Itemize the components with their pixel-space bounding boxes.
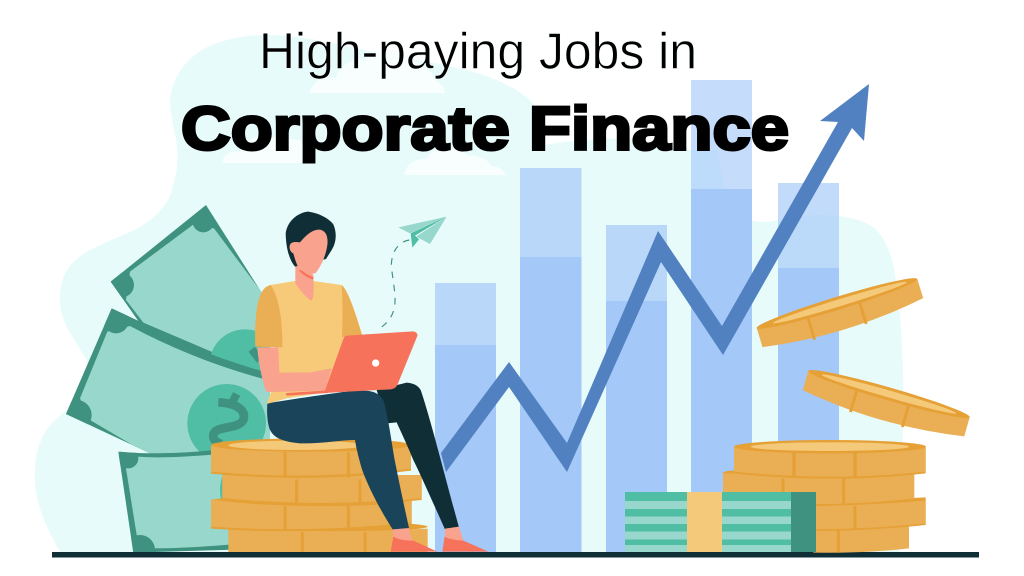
shirt [267, 281, 350, 404]
hair [286, 212, 336, 267]
coin 3 [211, 495, 412, 531]
paper plane with dashed trail [381, 217, 447, 328]
neck [295, 262, 314, 301]
plane [398, 217, 447, 248]
bar 4 [691, 80, 752, 552]
right coin stack [723, 440, 926, 553]
neck shadow [300, 270, 313, 278]
dark stripes [625, 492, 791, 545]
background blob [35, 35, 903, 552]
cloud: upper [310, 49, 445, 93]
paper band [687, 492, 722, 552]
bar 3 [606, 225, 667, 552]
laptop [324, 331, 417, 393]
coin 1 with gold top [211, 438, 411, 478]
dashed trail [381, 240, 409, 328]
man sitting with laptop [255, 212, 488, 552]
bar 2 [520, 168, 582, 552]
coin A with gold top [734, 440, 926, 479]
ground line [52, 552, 979, 558]
laptop base [287, 392, 327, 394]
banknotes [62, 200, 301, 565]
bundle side [791, 492, 816, 552]
arm [257, 347, 332, 392]
bar 5 [778, 183, 839, 552]
upper body [255, 212, 417, 404]
title [181, 22, 789, 162]
title line 1: High-paying Jobs in [259, 22, 697, 80]
left sleeve [255, 285, 282, 347]
bar 1 [435, 283, 496, 552]
far foot [445, 527, 463, 541]
rising arrow line [441, 84, 869, 472]
coin stack under the man [211, 438, 428, 552]
falling coin: upper [755, 273, 926, 355]
legs and shoes [267, 383, 488, 552]
coin D [813, 523, 909, 553]
coin 2 [222, 475, 422, 505]
cloud: right [404, 147, 506, 175]
near leg [267, 390, 409, 529]
cloud: left [222, 136, 310, 163]
coin 4 [228, 522, 428, 552]
falling coin: lower [801, 365, 972, 444]
far leg [377, 383, 459, 529]
bundle stripes [625, 492, 791, 552]
near foot [393, 528, 413, 542]
banknote: middle [66, 308, 270, 454]
right sleeve [342, 285, 362, 337]
title line 2: Corporate Finance [181, 94, 789, 162]
face [290, 230, 328, 274]
banknote: top [110, 205, 270, 371]
coin C [734, 497, 926, 531]
coin B [723, 468, 915, 504]
laptop logo [372, 359, 379, 367]
bar chart [435, 80, 839, 552]
banknote: bottom [118, 450, 228, 552]
cash bundle [625, 492, 816, 552]
clouds [222, 49, 506, 175]
far shoe [442, 537, 488, 552]
near shoe [391, 537, 437, 552]
